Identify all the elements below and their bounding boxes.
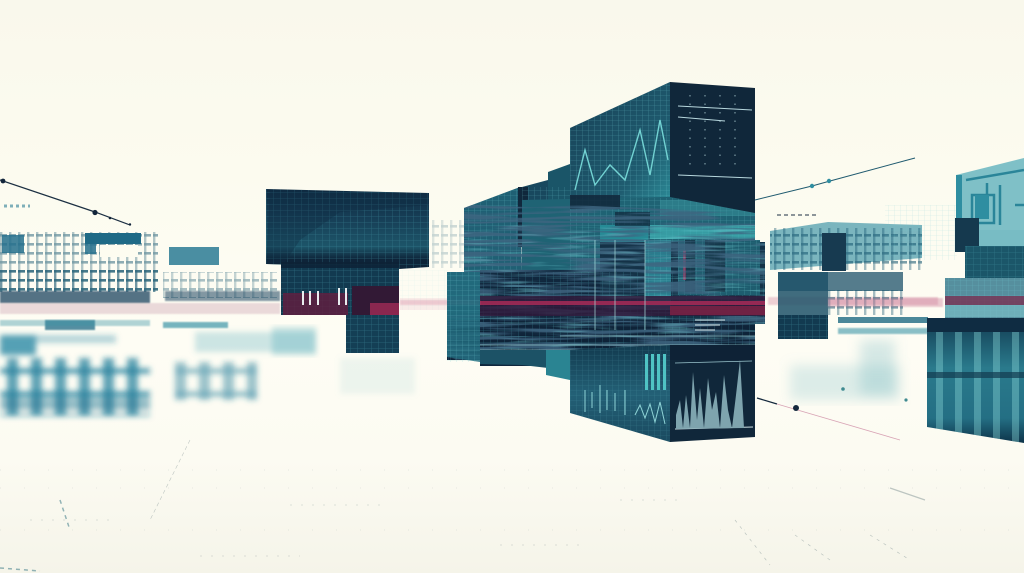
middle connectors [548,164,570,272]
central teal core [522,195,755,272]
lower right falling line with nodes [757,387,908,440]
faint grid behind central block [400,220,465,310]
right reflected panel [927,318,1024,443]
right grid cluster [770,205,957,339]
reflected block dark front face [670,345,755,442]
right blurred reflection [790,340,900,400]
far right panels [945,158,1024,318]
right rising chart line with nodes [755,158,915,215]
lower main mass [447,272,482,357]
central block structure [400,82,938,442]
left chart line with nodes [0,179,131,226]
tower dark front face [670,82,755,213]
left faint grid city [0,232,316,355]
bright scan lines [447,336,755,350]
lower side flanks [447,272,480,362]
dark block upper left [266,189,429,353]
reflected block left face [570,345,670,442]
left blurred reflection grid [0,332,415,416]
floor scratches and speckle [0,440,1024,571]
glitch streak texture [447,205,765,360]
upper tower left face [570,82,670,205]
red data band [480,296,765,316]
